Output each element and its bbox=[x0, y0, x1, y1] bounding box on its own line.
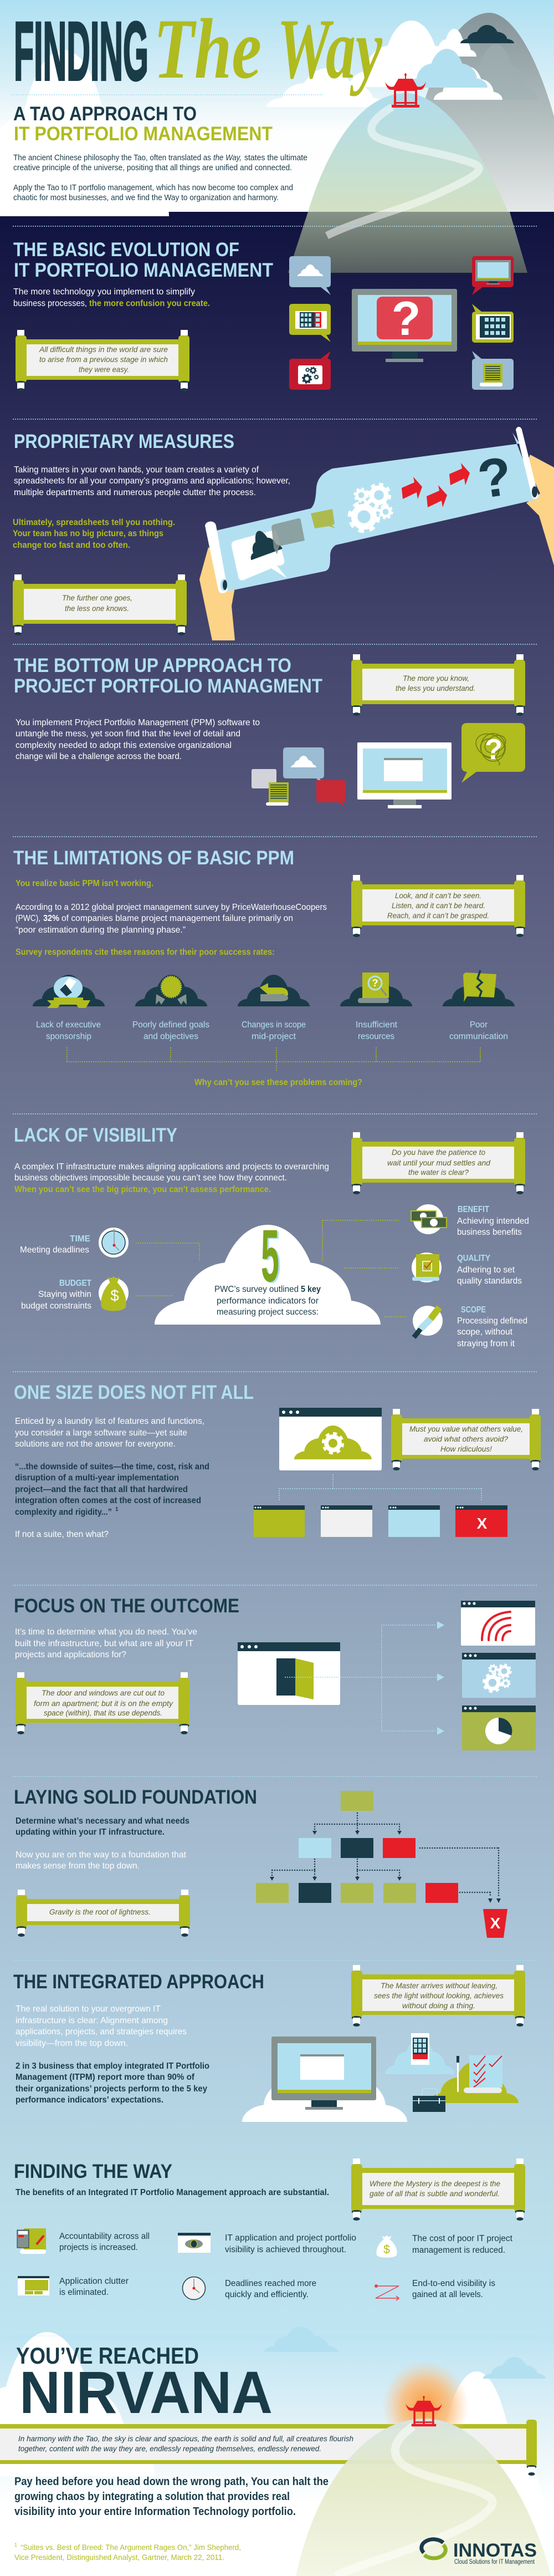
briefcase bbox=[413, 2089, 445, 2112]
indicator: time bbox=[20, 1228, 129, 1258]
problem labels: Lack of executive bbox=[36, 1020, 101, 1030]
indicator: benefit: Achieving intended bbox=[457, 1216, 529, 1226]
icon: tablet bubble bbox=[472, 304, 514, 343]
heading: IT PORTFOLIO MANAGEMENT bbox=[14, 259, 273, 281]
problem labels bbox=[36, 1020, 508, 1041]
heading: THE BASIC EVOLUTION OF bbox=[13, 239, 239, 261]
panel: nirvana bbox=[0, 2326, 554, 2576]
indicator: budget: Staying within bbox=[38, 1290, 91, 1299]
indicator: quality bbox=[412, 1253, 522, 1286]
text block: multiple departments and numerous people clutter the process. bbox=[14, 488, 256, 497]
gray bubble bbox=[271, 518, 305, 554]
central cloud with 5: 5 key bbox=[301, 1285, 321, 1294]
scroll quote: without doing a thing. bbox=[402, 2001, 475, 2010]
text block: 2 in 3 business that employ integrated IT Portfolio bbox=[16, 2061, 209, 2071]
icon: goals ribbon badge bbox=[135, 975, 207, 1006]
scroll quote bbox=[16, 330, 189, 391]
green callout: Ultimately, spreadsheets tell you nothing. bbox=[13, 518, 175, 527]
text block: their organizations’ projects perform to the 5 key bbox=[16, 2084, 207, 2094]
icon: document bubble bbox=[472, 351, 514, 390]
text block: The real solution to your overgrown IT bbox=[16, 2004, 161, 2014]
heading: THE INTEGRATED APPROACH bbox=[13, 1971, 264, 1993]
text block: Management (ITPM) report more than 90% of bbox=[16, 2073, 195, 2082]
problem labels: and objectives bbox=[143, 1032, 198, 1041]
intro text: the Way, bbox=[213, 154, 242, 162]
subtitle: A TAO APPROACH TO bbox=[13, 103, 197, 125]
small windows bbox=[254, 1505, 507, 1537]
text block: applications, projects, and strategies requires bbox=[16, 2027, 187, 2037]
intro text bbox=[13, 154, 307, 202]
scroll quote bbox=[391, 1409, 541, 1470]
icon: magnifier on document bbox=[340, 973, 412, 1006]
icon: monitor bbox=[357, 742, 452, 808]
problem labels: Changes in scope bbox=[242, 1020, 306, 1030]
quote text: integration often comes at the cost of increased bbox=[15, 1496, 201, 1505]
scroll quote: How ridiculous! bbox=[440, 1444, 492, 1453]
heading: THE BOTTOM UP APPROACH TO bbox=[14, 655, 291, 676]
connectors bbox=[285, 1621, 444, 1735]
text block: Enticed by a laundry list of features and functions, bbox=[15, 1417, 204, 1426]
scroll quote bbox=[351, 1132, 525, 1194]
central cloud with 5 bbox=[155, 1215, 381, 1325]
footnote: 1 bbox=[14, 2542, 17, 2548]
icon: gears bubble bbox=[289, 351, 331, 390]
text block: updating within your IT infrastructure. bbox=[16, 1827, 165, 1837]
icon: monitor with question mark bbox=[352, 289, 457, 362]
heading: FOCUS ON THE OUTCOME bbox=[14, 1595, 239, 1617]
heading: PROPRIETARY MEASURES bbox=[14, 431, 234, 452]
benefit: end-to-end visibility bbox=[375, 2279, 495, 2300]
icon: suite window bbox=[279, 1408, 382, 1470]
gears bbox=[350, 485, 392, 531]
intro text: states the ultimate bbox=[244, 154, 307, 162]
icon: scope change arrow bbox=[238, 975, 310, 1006]
central cloud with 5: 5 bbox=[263, 1216, 281, 1299]
heading: FINDING THE WAY bbox=[14, 2161, 172, 2182]
text block: It’s time to determine what you do need. You’ve bbox=[15, 1627, 197, 1637]
scroll quote: Must you value what others value, bbox=[409, 1424, 523, 1433]
text block: solutions are not the answer for everyone. bbox=[15, 1439, 176, 1449]
icon: cloud bubble bbox=[283, 747, 324, 786]
scroll banner: In harmony with the Tao, the sky is clear and spacious, the earth is solid and full, all creatures flourish bbox=[18, 2434, 353, 2443]
icon: magnifier on document: ? bbox=[372, 978, 378, 989]
text block: makes sense from the top down. bbox=[16, 1861, 140, 1871]
text block: projects and applications for? bbox=[15, 1650, 126, 1659]
closing text bbox=[14, 2476, 329, 2518]
indicator: benefit: BENEFIT bbox=[458, 1205, 489, 1214]
org chart diagram bbox=[256, 1791, 501, 1903]
icon: door window bbox=[238, 1642, 340, 1705]
icon: phone bubble bbox=[289, 304, 331, 342]
indicator: scope: scope, without bbox=[457, 1327, 513, 1337]
icon: gray card bbox=[252, 769, 276, 788]
benefit: visibility bbox=[178, 2233, 356, 2254]
intro text: Apply the Tao to IT portfolio management, which has now become too complex and bbox=[13, 184, 293, 192]
text block: infrastructure is clear: Alignment among bbox=[16, 2016, 168, 2025]
indicator: benefit bbox=[411, 1204, 529, 1237]
quote text: If not a suite, then what? bbox=[15, 1530, 109, 1539]
icon: question bubble with scribble: ? bbox=[485, 734, 502, 766]
benefit: accountability bbox=[17, 2228, 150, 2254]
benefit: end-to-end visibility: gained at all levels. bbox=[412, 2290, 483, 2299]
text block: you consider a large software suite—yet suite bbox=[15, 1428, 187, 1438]
lead text: The benefits of an Integrated IT Portfolio Management approach are substantial. bbox=[16, 2188, 329, 2197]
text block: The more technology you implement to simplify bbox=[13, 287, 195, 297]
icon: document roll bbox=[266, 782, 289, 806]
text block: 32% bbox=[43, 914, 59, 923]
indicator: time: TIME bbox=[70, 1234, 90, 1244]
text block: (PWC), bbox=[16, 914, 40, 923]
icon: monitor bubble bbox=[472, 256, 514, 295]
scroll quote: the less one knows. bbox=[65, 604, 129, 613]
text block: “poor estimation during the planning phase.” bbox=[16, 925, 186, 935]
icon: red bucket bbox=[483, 1909, 507, 1938]
scroll quote: The door and windows are cut out to bbox=[42, 1688, 165, 1697]
quote text: “...the downside of suites—the time, cost, risk and bbox=[15, 1462, 209, 1472]
intro text: chaotic for most businesses, and we find the Way to organization and harmony. bbox=[13, 194, 279, 202]
benefit: accountability: projects is increased. bbox=[59, 2243, 138, 2252]
scroll quote: The Master arrives without leaving, bbox=[381, 1981, 497, 1990]
scroll quote bbox=[16, 1672, 189, 1734]
text block: built the infrastructure, but what are all your IT bbox=[15, 1639, 193, 1648]
icon: cloud bubble bbox=[289, 256, 331, 295]
heading: PROJECT PORTFOLIO MANAGMENT bbox=[14, 675, 322, 697]
problem labels: Insufficient bbox=[356, 1020, 398, 1030]
mountain clouds bbox=[349, 21, 537, 100]
icon: broken bubble bbox=[443, 970, 515, 1006]
green callout bbox=[13, 518, 175, 550]
panel: hero bbox=[0, 0, 554, 273]
indicator: quality: QUALITY bbox=[457, 1254, 490, 1263]
panel: integrated approach bbox=[13, 1965, 525, 2122]
title: Way bbox=[277, 1, 383, 96]
text block: the more confusion you create. bbox=[89, 299, 210, 308]
indicator: quality: Adhering to set bbox=[457, 1265, 515, 1275]
scroll banner: together, content with the way they are, endlessly repeating themselves, endlessly renewed. bbox=[18, 2444, 321, 2453]
text block bbox=[15, 1417, 204, 1449]
text block bbox=[14, 465, 290, 497]
scroll quote: to arise from a previous stage in which bbox=[39, 355, 168, 364]
text block bbox=[16, 879, 327, 957]
back mountain bbox=[388, 13, 554, 212]
text block: Survey respondents cite these reasons for their poor success rates: bbox=[16, 948, 275, 957]
indicator: scope: straying from it bbox=[457, 1339, 515, 1348]
blue cloud with phone bbox=[385, 2033, 454, 2074]
icon: pagoda bbox=[406, 2396, 442, 2426]
heading: LAYING SOLID FOUNDATION bbox=[14, 1786, 257, 1808]
quote text: project—and the fact that all that hardwired bbox=[15, 1485, 188, 1494]
scroll quote bbox=[13, 574, 187, 635]
text block bbox=[15, 1627, 197, 1659]
text block bbox=[16, 1816, 189, 1871]
scroll quote bbox=[351, 875, 525, 937]
benefit: cost: $ bbox=[383, 2243, 390, 2256]
footnote: Vice President, Distinguished Analyst, Gartner, March 22, 2011. bbox=[14, 2553, 224, 2562]
scroll quote: gate of all that is subtle and wonderful. bbox=[370, 2189, 500, 2198]
green callout: change too fast and too often. bbox=[13, 541, 130, 550]
panel: bottom up approach bbox=[14, 654, 525, 808]
text block: performance indicators’ expectations. bbox=[16, 2095, 163, 2105]
heading: NIRVANA bbox=[19, 2359, 273, 2426]
quote text: complexity and rigidity...” bbox=[15, 1508, 112, 1517]
scroll quote: The further one goes, bbox=[62, 593, 132, 602]
right hand bbox=[526, 455, 554, 566]
nirvana mountain bbox=[296, 2419, 551, 2576]
monitor bbox=[271, 2037, 376, 2110]
problem labels: Poor bbox=[470, 1020, 488, 1030]
scroll quote bbox=[16, 1890, 190, 1937]
connector bbox=[279, 1475, 481, 1501]
text block: untangle the mess, yet soon find that the level of detail and bbox=[16, 729, 240, 739]
benefit: visibility: visibility is achieved throughout. bbox=[225, 2245, 346, 2254]
scroll quote: the water is clear? bbox=[408, 1168, 469, 1177]
central cloud with 5: 5 bbox=[261, 1215, 279, 1297]
benefit: end-to-end visibility: End-to-end visibility is bbox=[412, 2279, 495, 2288]
subtitle: IT PORTFOLIO MANAGEMENT bbox=[14, 123, 273, 145]
scroll quote: form an apartment; but it is on the empty bbox=[34, 1699, 173, 1708]
text block: Taking matters in your own hands, your team creates a variety of bbox=[14, 465, 259, 475]
scroll quote: sees the light without looking, achieves bbox=[374, 1991, 504, 2000]
scroll quote bbox=[351, 1965, 525, 2027]
left hand bbox=[199, 547, 235, 640]
benefit: cost bbox=[376, 2234, 513, 2258]
callout question: Why can’t you see these problems coming? bbox=[194, 1078, 362, 1087]
text block: You realize basic PPM isn’t working. bbox=[16, 879, 153, 888]
text block: A complex IT infrastructure makes aligning applications and projects to overarching bbox=[14, 1162, 329, 1172]
central cloud with 5: performance indicators for bbox=[217, 1296, 319, 1306]
text block: When you can’t see the big picture, you can’t assess performance. bbox=[14, 1185, 271, 1194]
benefit: deadlines: Deadlines reached more bbox=[225, 2279, 316, 2288]
green callout: Your team has no big picture, as things bbox=[13, 529, 163, 538]
indicator: budget: $ bbox=[110, 1287, 119, 1304]
logo: innotas bbox=[422, 2539, 537, 2565]
indicator: scope: Processing defined bbox=[457, 1316, 527, 1326]
icon: pie window bbox=[462, 1706, 536, 1750]
scroll banner bbox=[0, 2420, 537, 2476]
central cloud with 5: PWC’s survey outlined bbox=[214, 1285, 299, 1294]
text block bbox=[16, 2004, 209, 2105]
green bubble bbox=[311, 509, 336, 528]
nirvana clouds bbox=[0, 2326, 554, 2576]
text block: change will be a challenge across the board. bbox=[16, 752, 182, 761]
spreadsheet banner bbox=[216, 432, 538, 592]
text block: spreadsheets for all your company’s programs and applications; however, bbox=[14, 476, 290, 486]
red arrows bbox=[402, 463, 470, 507]
subtitle bbox=[13, 103, 273, 145]
background clouds bbox=[0, 50, 388, 216]
green cloud with checklist bbox=[429, 2055, 519, 2103]
problem labels: mid-project bbox=[252, 1032, 296, 1041]
central cloud with 5: measuring project success: bbox=[217, 1307, 319, 1317]
indicator: benefit: business benefits bbox=[457, 1228, 522, 1237]
glow bbox=[382, 2361, 469, 2452]
scroll quote: The more you know, bbox=[403, 674, 469, 683]
icon: pagoda bbox=[385, 73, 426, 108]
footnote: “Suites vs. Best of Breed: The Argument Rages On,” Jim Shepherd, bbox=[20, 2543, 241, 2552]
panel: focus on the outcome bbox=[14, 1595, 536, 1750]
indicator: scope: SCOPE bbox=[461, 1305, 486, 1315]
problem labels: communication bbox=[449, 1032, 508, 1041]
icon: executive sponsorship crystal ball bbox=[33, 975, 105, 1008]
heading bbox=[14, 655, 322, 697]
footnote bbox=[14, 2542, 241, 2562]
white bubble with cloud bbox=[232, 525, 287, 581]
cloud base bbox=[242, 2051, 407, 2122]
scroll quote: they were easy. bbox=[79, 365, 129, 374]
intro text: creative principle of the universe, positing that all things are unified and connected. bbox=[13, 164, 292, 172]
closing text: visibility into your entire Information Technology portfolio. bbox=[14, 2506, 296, 2518]
text block bbox=[13, 287, 210, 308]
text block: business objectives impossible because you can’t see how they connect. bbox=[14, 1173, 287, 1183]
scroll quote: space (within), that its use depends. bbox=[44, 1708, 162, 1717]
panel: laying solid foundation bbox=[14, 1786, 507, 1938]
dotted connector bbox=[67, 1048, 480, 1072]
heading: ONE SIZE DOES NOT FIT ALL bbox=[14, 1382, 254, 1403]
icon: wifi window bbox=[461, 1601, 535, 1646]
text block: visibility—from the top down. bbox=[16, 2039, 128, 2048]
benefit: deadlines bbox=[183, 2277, 316, 2300]
intro text: The ancient Chinese philosophy the Tao, often translated as bbox=[13, 154, 211, 162]
text block: complexity needed to adopt this extensive organizational bbox=[16, 741, 232, 750]
icon: gears window bbox=[462, 1653, 536, 1698]
quote text bbox=[15, 1462, 209, 1539]
problem labels: sponsorship bbox=[46, 1032, 91, 1041]
heading bbox=[13, 239, 273, 281]
closing text: Pay heed before you head down the wrong path, You can halt the bbox=[14, 2476, 329, 2488]
logo: innotas: Cloud Solutions for IT Management bbox=[454, 2559, 535, 2565]
front mountain bbox=[288, 93, 527, 273]
text block: Now you are on the way to a foundation that bbox=[16, 1850, 187, 1860]
scroll quote: the less you understand. bbox=[396, 684, 475, 693]
panel: proprietary measures bbox=[13, 427, 554, 640]
text block bbox=[14, 1162, 329, 1194]
scroll quote: Where the Mystery is the deepest is the bbox=[370, 2179, 500, 2188]
benefit: cost: management is reduced. bbox=[412, 2246, 505, 2255]
text block: Determine what’s necessary and what needs bbox=[16, 1816, 189, 1826]
icon: monitor with question mark: ? bbox=[392, 292, 420, 345]
problem labels: Poorly defined goals bbox=[132, 1020, 209, 1030]
problem labels: resources bbox=[358, 1032, 394, 1041]
panel: lack of visibility bbox=[14, 1124, 529, 1348]
quote text: disruption of a multi-year implementation bbox=[15, 1473, 179, 1483]
indicator: quality: quality standards bbox=[457, 1276, 522, 1286]
title: FINDING bbox=[14, 4, 148, 98]
panel: one size does not fit all bbox=[14, 1382, 541, 1539]
text block: of companies blame project management failure primarily on bbox=[61, 914, 293, 923]
illustration: integrated portfolio bbox=[242, 2033, 519, 2122]
scroll quote: Reach, and it can’t be grasped. bbox=[387, 911, 489, 920]
small windows: X bbox=[477, 1515, 488, 1532]
icon: question bubble with scribble bbox=[461, 723, 525, 783]
scroll quote: All difficult things in the world are sure bbox=[39, 345, 168, 354]
indicator: budget: BUDGET bbox=[59, 1279, 91, 1288]
indicator: budget: budget constraints bbox=[21, 1301, 91, 1311]
indicator: budget bbox=[21, 1276, 129, 1311]
text block: You implement Project Portfolio Management (PPM) software to bbox=[16, 718, 260, 727]
icon: red bubble bbox=[316, 780, 346, 807]
panel: limitations of basic PPM bbox=[13, 847, 525, 1087]
benefit: deadlines: quickly and efficiently. bbox=[225, 2290, 309, 2299]
scroll quote: avoid what others avoid? bbox=[424, 1434, 508, 1443]
benefit: visibility: IT application and project portfolio bbox=[225, 2233, 356, 2243]
benefit: clutter bbox=[18, 2276, 129, 2297]
scroll quote bbox=[351, 2158, 525, 2221]
indicator: scope bbox=[413, 1305, 527, 1348]
closing text: growing chaos by integrating a solution that provides real bbox=[14, 2491, 290, 2503]
question mark: ? bbox=[474, 445, 515, 510]
benefit: accountability: Accountability across all bbox=[59, 2232, 150, 2241]
text block bbox=[16, 718, 260, 761]
heading: YOU’VE REACHED bbox=[16, 2343, 199, 2369]
illustration: hands holding spreadsheet bbox=[199, 427, 554, 640]
scroll quote: Do you have the patience to bbox=[392, 1148, 485, 1157]
icon: red bucket: X bbox=[490, 1915, 501, 1932]
scroll rolls bbox=[205, 427, 538, 593]
panel: basic evolution bbox=[13, 239, 514, 391]
benefit: clutter: Application clutter bbox=[59, 2277, 129, 2286]
text block: business processes, bbox=[13, 299, 87, 308]
benefit: clutter: is eliminated. bbox=[59, 2288, 109, 2297]
title: The bbox=[153, 1, 261, 96]
text block: According to a 2012 global project management survey by PriceWaterhouseCoopers bbox=[16, 903, 327, 912]
scroll quote: wait until your mud settles and bbox=[387, 1158, 491, 1167]
quote text: 1 bbox=[115, 1506, 119, 1513]
heading: THE LIMITATIONS OF BASIC PPM bbox=[13, 847, 294, 869]
scroll quote: Gravity is the root of lightness. bbox=[49, 1907, 151, 1916]
heading: LACK OF VISIBILITY bbox=[14, 1124, 177, 1146]
panel: finding the way benefits bbox=[14, 2158, 525, 2300]
indicator: time: Meeting deadlines bbox=[20, 1245, 89, 1255]
benefit: cost: The cost of poor IT project bbox=[412, 2234, 513, 2243]
scroll quote bbox=[351, 654, 525, 716]
scroll quote: Listen, and it can’t be heard. bbox=[392, 901, 485, 910]
scroll quote: Look, and it can’t be seen. bbox=[395, 891, 481, 900]
logo: innotas: INNOTAS bbox=[453, 2540, 537, 2561]
connectors bbox=[136, 1220, 406, 1317]
